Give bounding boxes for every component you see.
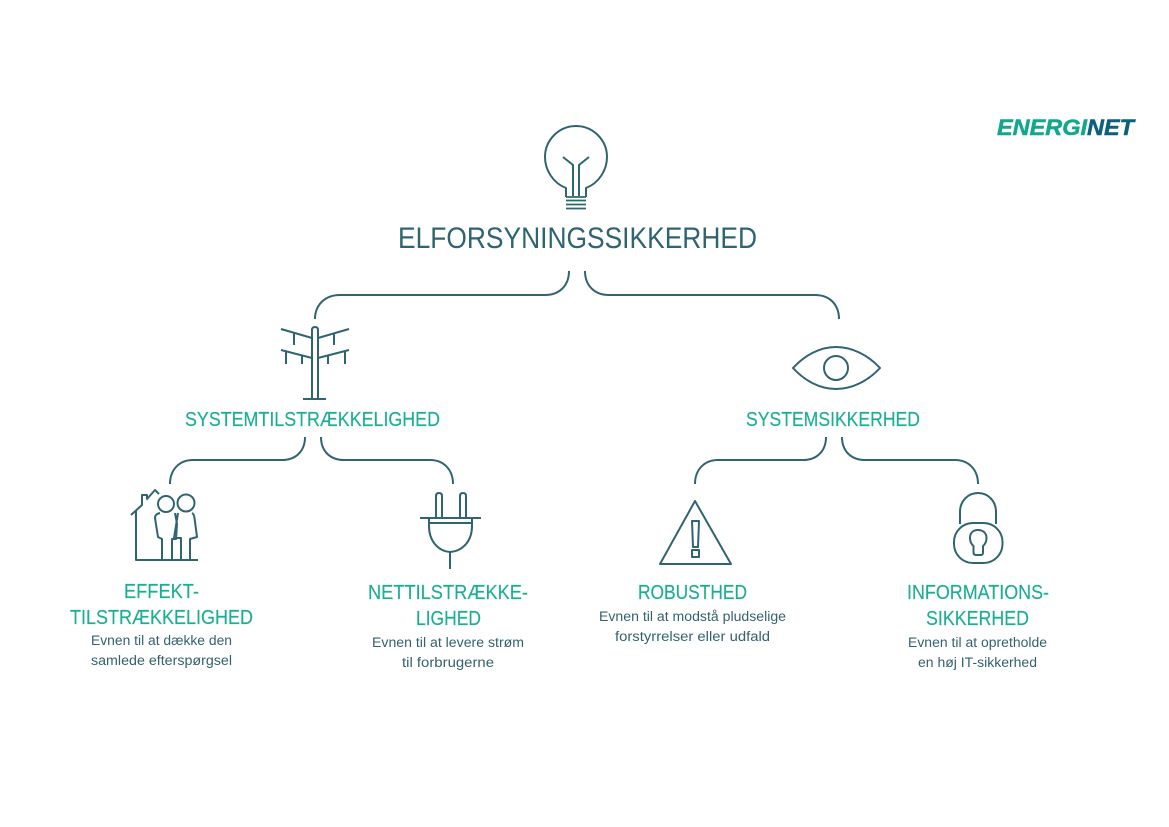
text block: effekttilstrækkelighed — [70, 581, 253, 668]
icon: padlock — [954, 493, 1002, 563]
icon: warning triangle — [660, 501, 731, 564]
heading: INFORMATIONS- — [907, 582, 1049, 604]
description — [599, 609, 786, 644]
text block: informationssikkerhed — [907, 582, 1049, 670]
connector: title to two branches — [315, 271, 839, 319]
text block: robusthed — [599, 582, 786, 644]
text block: nettilstrækkelighed — [368, 582, 528, 670]
description: Evnen til at levere strøm — [372, 635, 524, 650]
heading: ROBUSTHED — [638, 582, 747, 604]
description: Evnen til at opretholde — [908, 635, 1047, 650]
description: forstyrrelser eller udfald — [615, 629, 770, 644]
heading: Systemtilstrækkelighed: SYSTEMTILSTRÆKKELIGHED — [185, 409, 440, 431]
icon: plug — [420, 493, 481, 569]
heading: Systemsikkerhed: SYSTEMSIKKERHED — [746, 409, 920, 431]
connector: systemtilstrækkelighed branches — [170, 437, 453, 484]
icon: power pylon — [281, 327, 349, 399]
heading: EFFEKT- — [124, 581, 199, 603]
heading — [368, 582, 528, 630]
heading — [70, 581, 253, 629]
description: en høj IT-sikkerhed — [918, 655, 1037, 670]
description: til forbrugerne — [402, 655, 494, 670]
description — [91, 633, 232, 668]
title: ELFORSYNINGSSIKKERHED — [398, 222, 757, 255]
description — [372, 635, 524, 670]
description: Evnen til at dække den — [91, 633, 232, 648]
icon: house with two people — [131, 490, 198, 560]
description: samlede efterspørgsel — [91, 653, 232, 668]
heading: TILSTRÆKKELIGHED — [70, 607, 253, 629]
icon: light bulb — [545, 126, 607, 208]
logo: Energinet: ENERGI NET — [997, 115, 1136, 140]
connector: systemsikkerhed branches — [695, 437, 978, 484]
heading: SIKKERHED — [926, 608, 1029, 630]
icon: eye — [793, 347, 880, 389]
description — [908, 635, 1047, 670]
heading: LIGHED — [416, 608, 481, 630]
description: Evnen til at modstå pludselige — [599, 609, 786, 624]
heading: NETTILSTRÆKKE- — [368, 582, 528, 604]
heading — [907, 582, 1049, 630]
